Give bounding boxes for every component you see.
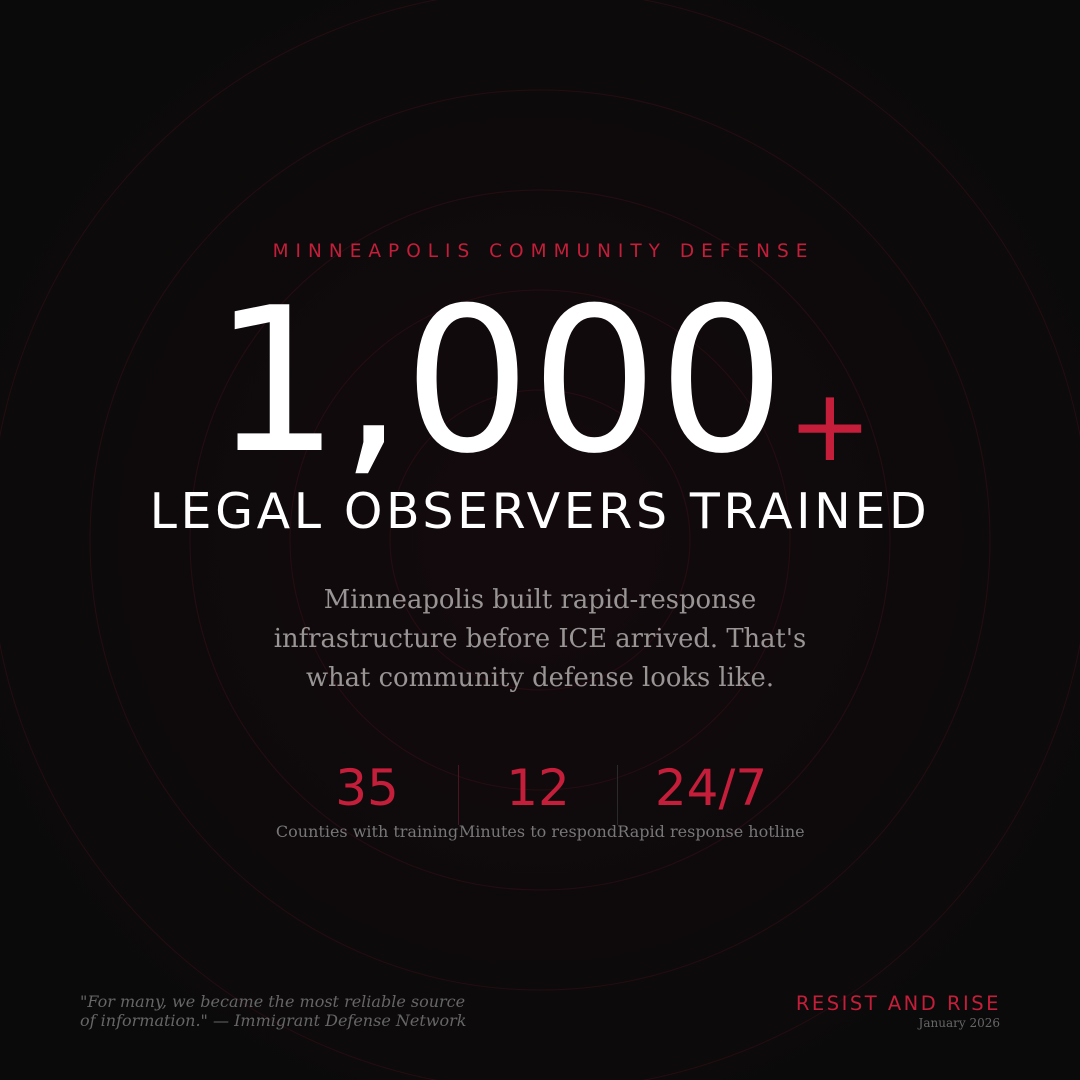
stat: minutes: 12: [506, 759, 570, 817]
big number: +: [788, 367, 872, 484]
brand: RESIST AND RISE: [796, 992, 1001, 1015]
stats row: [276, 759, 805, 841]
stat: hotline: Rapid response hotline: [617, 822, 805, 841]
stat: minutes: Minutes to respond: [459, 822, 617, 841]
subtitle: LEGAL OBSERVERS TRAINED: [150, 483, 930, 540]
description: [274, 585, 806, 693]
stat: counties: [276, 759, 458, 841]
quote: [80, 992, 466, 1030]
brand: January 2026: [919, 1016, 1000, 1030]
quote: "For many, we became the most reliable source: [80, 992, 465, 1011]
description: what community defense looks like.: [306, 663, 774, 693]
description: Minneapolis built rapid-response: [324, 585, 756, 615]
stat: hotline: 24/7: [655, 759, 767, 817]
quote: of information." — Immigrant Defense Network: [80, 1011, 466, 1030]
kicker heading: MINNEAPOLIS COMMUNITY DEFENSE: [273, 241, 814, 262]
brand: [796, 992, 1001, 1030]
stat: counties: Counties with training: [276, 822, 458, 841]
stat: minutes: [459, 759, 617, 841]
stat: counties: 35: [335, 759, 399, 817]
description: infrastructure before ICE arrived. That's: [274, 624, 806, 654]
stat: hotline: [617, 759, 805, 841]
big number: 1,000: [213, 265, 785, 498]
